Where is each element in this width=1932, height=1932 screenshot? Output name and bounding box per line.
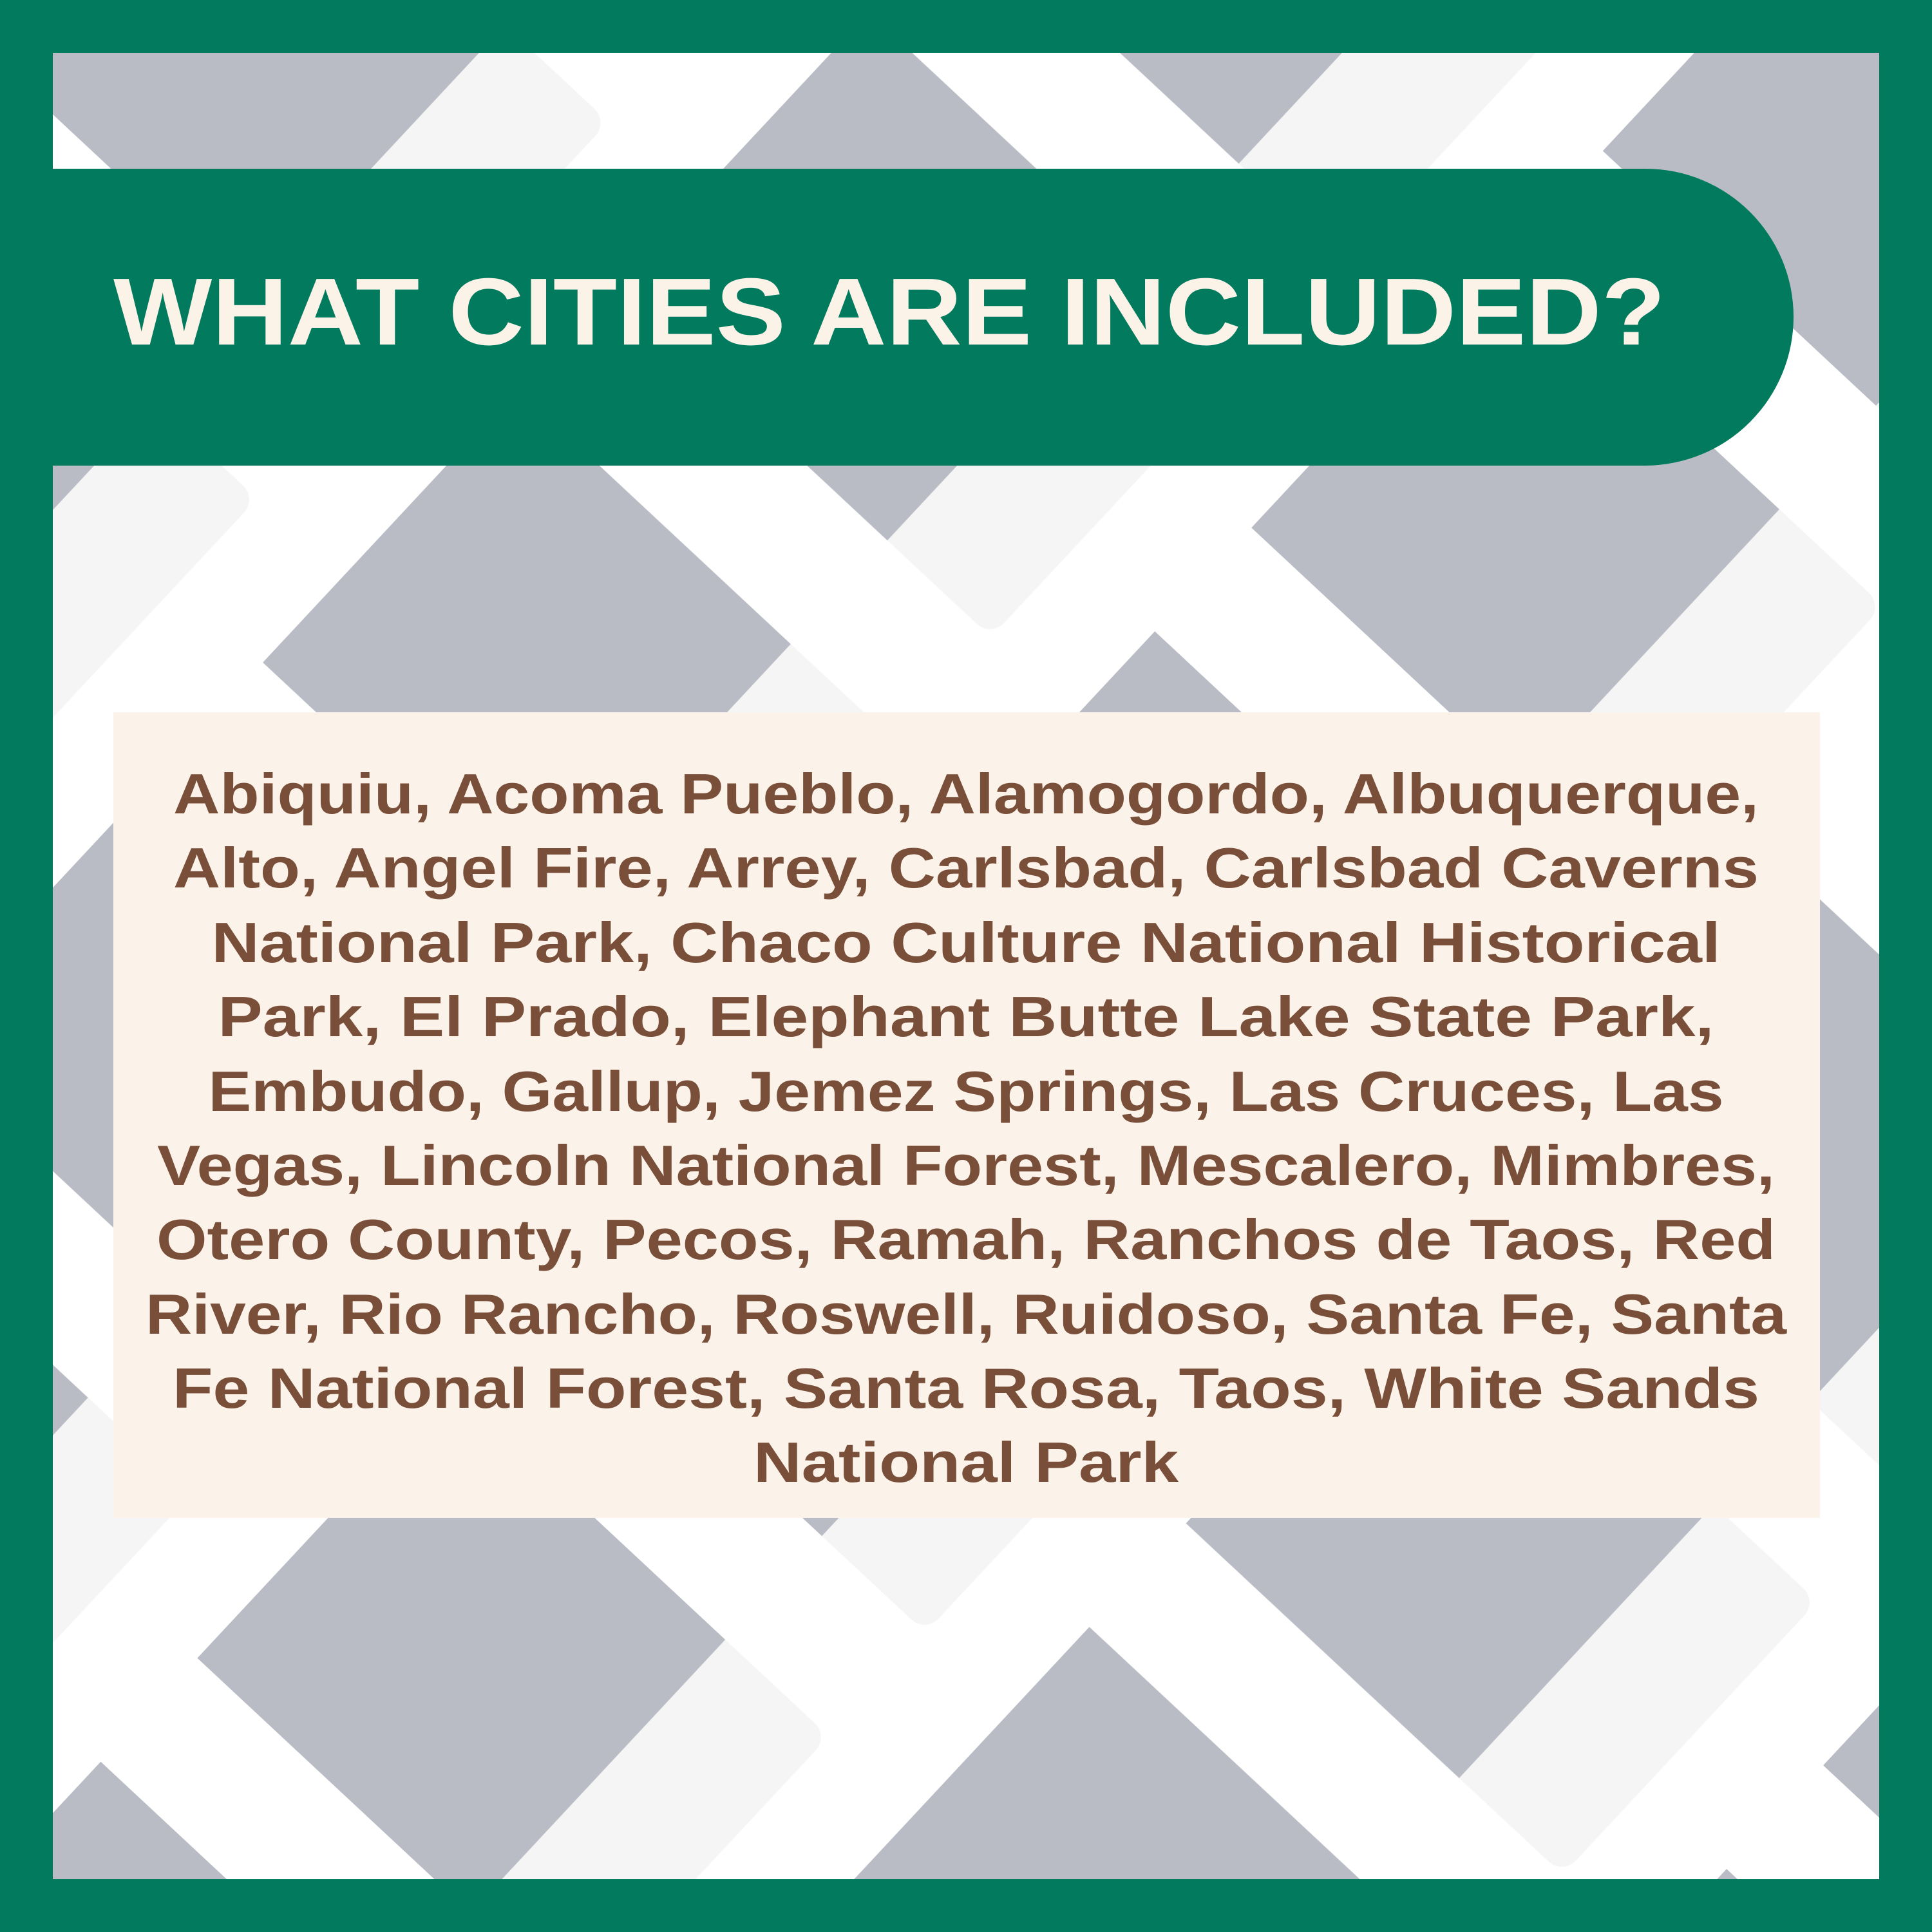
text: list of cities: National Park [753,1430,1179,1494]
text: list of cities: Otero County, Pecos, Ramah, Ranchos de Taos, Red [156,1208,1776,1271]
title: WHAT CITIES ARE INCLUDED? [113,259,1665,365]
text: list of cities: Embudo, Gallup, Jemez Springs, Las Cruces, Las [209,1059,1723,1123]
text: list of cities: River, Rio Rancho, Roswell, Ruidoso, Santa Fe, Santa [146,1282,1787,1346]
title banner [53,169,1794,466]
text: list of cities: Alto, Angel Fire, Arrey, Carlsbad, Carlsbad Caverns [173,836,1759,900]
text: list of cities: Vegas, Lincoln National Forest, Mescalero, Mimbres, [157,1133,1775,1197]
text: list of cities: National Park, Chaco Culture National Historical [211,911,1721,974]
text: list of cities: Park, El Prado, Elephant Butte Lake State Park, [218,985,1714,1048]
text: list of cities: Fe National Forest, Santa Rosa, Taos, White Sands [173,1356,1759,1420]
panel: city list [113,712,1820,1518]
text: list of cities: Abiquiu, Acoma Pueblo, Alamogordo, Albuquerque, [173,762,1759,826]
text: list of cities [146,762,1787,1494]
